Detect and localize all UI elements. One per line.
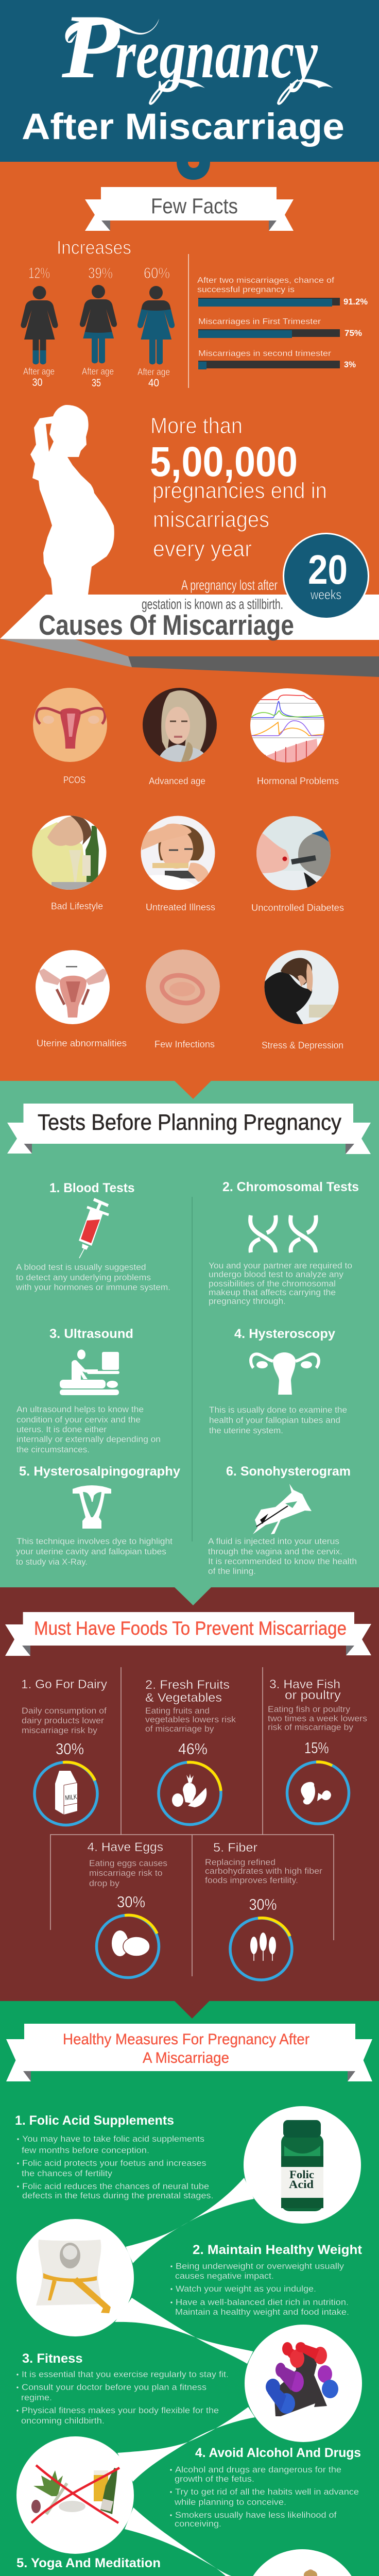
figure stat: 39 percent after age 35: 39% <box>88 265 113 282</box>
food 5: fiber: 5. Fiber <box>213 1841 257 1855</box>
measure text: conceiving. <box>175 2519 221 2529</box>
food 3: fish or poultry: 3. Have Fish <box>269 1677 340 1691</box>
measure text: the chances of fertility <box>22 2169 113 2178</box>
ribbon: healthy measures: Healthy Measures For Pregnancy After <box>63 2031 309 2048</box>
ribbon: must have foods <box>5 1612 371 1656</box>
food text: Replacing refined <box>205 1858 275 1867</box>
food text: risk of miscarriage by <box>268 1723 354 1732</box>
test heading: 3. Ultrasound <box>49 1327 133 1341</box>
food 5: fiber <box>205 1841 323 1980</box>
statistic: more than 5,00,000 pregnancies: More than <box>150 413 243 438</box>
orange section background <box>0 162 379 1081</box>
food text <box>89 1859 167 1888</box>
test heading: 1. Blood Tests <box>49 1181 135 1195</box>
food text: Eating eggs causes <box>89 1859 167 1868</box>
arrow: orange pointer <box>175 1081 211 1099</box>
food text: drop by <box>89 1879 120 1888</box>
food 4: eggs: 4. Have Eggs <box>88 1840 163 1854</box>
test text <box>16 1404 161 1454</box>
test text: through the vagina and the cervix. <box>208 1547 342 1556</box>
food text: Daily consumption of <box>22 1706 107 1716</box>
measure text <box>170 2262 349 2317</box>
bar: 75 percent: 75% <box>344 328 362 338</box>
ribbon: few facts <box>85 187 294 231</box>
test text: possibilities of the chromosomal <box>209 1279 336 1289</box>
food text: of miscarriage by <box>145 1724 214 1734</box>
test text <box>15 1262 170 1292</box>
donut: 30 percent <box>97 1915 159 1977</box>
donut: 15 percent <box>287 1762 349 1824</box>
food text: dairy products lower <box>22 1716 105 1725</box>
photo: weighing scale <box>16 2219 134 2336</box>
food text <box>145 1706 236 1734</box>
figure stat: 60 percent after age 40: 60% <box>144 265 170 282</box>
badge: 20 weeks: 20 <box>308 547 348 592</box>
test heading: 5. Hysterosalpingography <box>19 1464 180 1479</box>
cause label: bad lifestyle: Bad Lifestyle <box>51 901 103 911</box>
food text: carbohydrates with high fiber <box>205 1867 323 1876</box>
ribbon: few facts: Few Facts <box>151 194 238 218</box>
bar: 3 percent <box>198 360 356 369</box>
photo: folic acid bottle: Acid <box>289 2178 314 2191</box>
ribbon: tests before planning pregnancy: Tests Before Planning Pregnancy <box>38 1110 341 1135</box>
cause photo: stress and depression <box>263 948 340 1025</box>
food text <box>22 1706 107 1735</box>
measure text <box>16 2370 229 2426</box>
test text: This is usually done to examine the <box>209 1405 347 1415</box>
test text: with your hormones or immune system. <box>15 1282 170 1292</box>
ribbon: must have foods: Must Have Foods To Prevent Miscarriage <box>34 1618 347 1639</box>
measure text: Being underweight or overweight usually <box>176 2262 344 2271</box>
icon: uterus <box>251 1352 319 1395</box>
cause label: few infections: Few Infections <box>154 1039 215 1049</box>
test 6: sonohysterogram <box>208 1464 357 1576</box>
measure text: while planning to conceive. <box>174 2498 286 2507</box>
cause label: uncontrolled diabetes: Uncontrolled Diabetes <box>251 903 344 913</box>
test text <box>209 1405 347 1435</box>
test text: to detect any underlying problems <box>16 1273 151 1282</box>
test 1: blood tests <box>15 1181 170 1292</box>
test text: to study via X-Ray. <box>16 1557 88 1567</box>
food text: foods improves fertility. <box>205 1876 298 1885</box>
measure 2: healthy weight: 2. Maintain Healthy Weight <box>193 2243 363 2257</box>
maroon section background <box>0 1587 379 2001</box>
figure stat: 60 percent after age 40: After age <box>137 367 170 377</box>
test text: the uterine system. <box>209 1426 283 1435</box>
figure stat: 39 percent after age 35: 35 <box>92 377 101 389</box>
test text: makeup that affects carrying the <box>209 1287 336 1297</box>
figure stat: 60 percent after age 40 <box>137 265 175 389</box>
figure stat: 12 percent after age 30: 12% <box>28 265 50 282</box>
test text: A fluid is injected into your uterus <box>208 1536 339 1546</box>
badge: 20 weeks <box>283 533 369 619</box>
test text <box>16 1536 173 1567</box>
arrow: maroon pointer <box>175 2001 209 2019</box>
speech bubble connectors <box>115 2178 263 2576</box>
pregnant silhouette <box>30 405 114 595</box>
food 2: fruits and vegetables: 46% <box>178 1740 208 1758</box>
cause label: advanced age: Advanced age <box>149 776 205 786</box>
bar label: first trimester: Miscarriages in First Trimester <box>198 317 321 326</box>
measure text: Consult your doctor before you plan a fitness <box>22 2383 206 2392</box>
test heading: 4. Hysteroscopy <box>234 1327 335 1341</box>
ribbon: healthy measures: A Miscarriage <box>143 2049 229 2066</box>
cause photo: hormonal chart <box>250 688 325 763</box>
measure text: Physical fitness makes your body flexible for the <box>22 2406 219 2415</box>
measure text <box>17 2134 213 2200</box>
icon: shrimp and fish <box>301 1782 331 1805</box>
cause label: stress and depression: Stress & Depression <box>262 1040 343 1050</box>
heading band: causes of miscarriage: Causes Of Miscarriage <box>39 609 294 641</box>
divider <box>188 254 189 388</box>
test text <box>209 1261 352 1306</box>
measure 4: avoid alcohol and drugs: 4. Avoid Alcohol And Drugs <box>195 2446 361 2460</box>
measure 3: fitness: 3. Fitness <box>22 2351 82 2366</box>
food text: miscarriage risk to <box>89 1869 163 1878</box>
food text: vegetables lowers risk <box>145 1715 236 1724</box>
cause photo: bad lifestyle <box>31 814 108 891</box>
measure 2: healthy weight <box>16 2219 363 2336</box>
measure text: Try to get rid of all the habits well in advance <box>175 2487 359 2497</box>
icon: milk carton: MILK <box>65 1793 77 1802</box>
statistic: more than 5,00,000 pregnancies: miscarriages <box>153 507 269 532</box>
bar: 75 percent <box>198 328 362 338</box>
title: After Miscarriage <box>22 107 344 147</box>
bar label: after two miscarriages: successful pregnancy is <box>197 285 295 294</box>
food text: Eating fruits and <box>145 1706 210 1716</box>
measure text: Alcohol and drugs are dangerous for the <box>175 2465 341 2475</box>
measure text: regime. <box>21 2393 52 2402</box>
test text: internally or externally depending on <box>16 1434 161 1444</box>
food 2: fruits and vegetables: & Vegetables <box>145 1691 222 1705</box>
cause photo: advanced age <box>143 688 217 762</box>
food 1: dairy: 1. Go For Dairy <box>21 1677 107 1691</box>
cause photo: PCOS <box>31 685 108 762</box>
heading band: causes of miscarriage: gestation is known as a stillbirth. <box>142 596 283 612</box>
food text: miscarriage risk by <box>22 1726 98 1735</box>
heading band: causes of miscarriage <box>0 577 379 677</box>
food 5: fiber: 30% <box>249 1895 277 1913</box>
donut: 30 percent <box>35 1762 97 1825</box>
cause label: uterine abnormalities: Uterine abnormalities <box>37 1038 127 1048</box>
photo: folic acid bottle <box>244 2106 361 2224</box>
test text: undergo blood test to analyze any <box>209 1269 344 1279</box>
test text: This technique involves dye to highlight <box>16 1536 173 1546</box>
test text: It is recommended to know the health <box>208 1556 357 1566</box>
measure text: oncoming childbirth. <box>21 2416 105 2426</box>
test text <box>208 1536 357 1576</box>
test heading: 6. Sonohysterogram <box>226 1464 351 1479</box>
ribbon: tests before planning pregnancy <box>7 1104 371 1154</box>
measure text: Watch your weight as you indulge. <box>176 2284 316 2294</box>
figure stat: 39 percent after age 35: After age <box>82 366 114 377</box>
bar: 3 percent: 3% <box>344 360 356 369</box>
bar chart: chance and trimesters <box>197 276 368 369</box>
measure text: Maintain a healthy weight and food intake. <box>175 2308 349 2317</box>
statistic: more than 5,00,000 pregnancies: pregnancies end in <box>152 478 327 503</box>
test text: of the lining. <box>208 1566 256 1576</box>
measure 5: yoga and meditation: 5. Yoga And Meditation <box>16 2556 161 2570</box>
icon: fruits <box>172 1774 206 1807</box>
icon: ultrasound exam <box>60 1350 119 1395</box>
test text: the circumstances. <box>16 1445 90 1454</box>
food 4: eggs <box>88 1840 167 1977</box>
photo: group yoga <box>244 2549 361 2576</box>
cause label: hormonal problems: Hormonal Problems <box>257 776 339 786</box>
icon: syringe <box>79 1199 109 1258</box>
title: regnancy <box>115 16 318 93</box>
test text: pregnancy through. <box>209 1296 286 1306</box>
measure 3: fitness <box>16 2325 362 2442</box>
measure text: It is essential that you exercise regularly to stay fit. <box>22 2370 229 2379</box>
heading band: causes of miscarriage: A pregnancy lost after <box>181 577 278 593</box>
measure text: Folic acid reduces the chances of neural tube <box>22 2182 209 2191</box>
food 4: eggs: 30% <box>117 1893 145 1911</box>
measure text: few months before conception. <box>22 2146 149 2155</box>
measure text: defects in the fetus during the prenatal stages. <box>22 2191 213 2200</box>
measure text: Folic acid protects your foetus and increases <box>22 2159 206 2168</box>
test text: condition of your cervix and the <box>16 1415 141 1425</box>
donut: 30 percent <box>230 1918 292 1980</box>
icon: chromosomes <box>250 1215 316 1252</box>
measure text <box>170 2465 359 2529</box>
test text: An ultrasound helps to know the <box>16 1404 144 1414</box>
bar label: second trimester: Miscarriages in second trimester <box>198 349 331 358</box>
food 2: fruits and vegetables <box>145 1678 236 1825</box>
food 2: fruits and vegetables: 2. Fresh Fruits <box>145 1678 230 1692</box>
test text: A blood test is usually suggested <box>16 1262 146 1272</box>
measure text: causes negative impact. <box>175 2272 274 2281</box>
food text: two times a week lowers <box>268 1714 367 1723</box>
title <box>22 0 344 147</box>
icon: uterus with probe <box>253 1484 312 1534</box>
green section background <box>0 2001 379 2576</box>
cause photo: uterine abnormalities diagram <box>33 948 111 1025</box>
food 1: dairy: 30% <box>56 1740 84 1758</box>
food 3: fish or poultry <box>268 1677 367 1824</box>
test heading: 2. Chromosomal Tests <box>222 1180 359 1194</box>
photo: folic acid bottle: Folic <box>289 2168 314 2181</box>
bar: 91.2 percent <box>198 297 368 307</box>
statistic: more than 5,00,000 pregnancies <box>150 413 327 562</box>
test text: health of your fallopian tubes and <box>209 1415 340 1425</box>
hook connector <box>177 162 210 180</box>
photo: alcohol and drugs crossed out <box>16 2436 134 2554</box>
statistic: more than 5,00,000 pregnancies: every year <box>153 536 252 562</box>
measure text: Have a well-balanced diet rich in nutrition. <box>176 2298 349 2307</box>
header background <box>0 0 379 162</box>
bar label: after two miscarriages: After two miscarriages, chance of <box>197 276 335 285</box>
bar: 91.2 percent: 91.2% <box>343 297 368 307</box>
food 3: fish or poultry: 15% <box>304 1739 329 1757</box>
food text: Eating fish or poultry <box>268 1705 351 1714</box>
icon: milk carton <box>55 1771 77 1815</box>
badge: 20 weeks: weeks <box>310 587 341 602</box>
test text: uterus. It is done either <box>16 1425 107 1434</box>
measure text: You may have to take folic acid supplements <box>22 2134 204 2144</box>
measure text: Smokers usually have less likelihood of <box>175 2511 337 2520</box>
figure stat: 12 percent after age 30: After age <box>23 366 55 377</box>
donut: 46 percent <box>159 1762 221 1825</box>
cause label: PCOS: PCOS <box>63 775 85 785</box>
measure text: growth of the fetus. <box>175 2475 254 2484</box>
figure stat: 39 percent after age 35 <box>80 265 117 389</box>
icon: cervix and uterine cavity <box>73 1485 111 1529</box>
bar label: after two miscarriages <box>197 276 335 294</box>
arrow: teal pointer <box>175 1587 211 1605</box>
test text: your uterine cavity and fallopian tubes <box>16 1547 166 1556</box>
cause label: untreated illness: Untreated Illness <box>146 902 215 912</box>
measure 1: folic acid <box>15 2106 361 2224</box>
measure 4: avoid alcohol and drugs <box>16 2436 361 2554</box>
ribbon: healthy measures <box>6 2024 372 2081</box>
measure 5: yoga and meditation <box>16 2549 361 2576</box>
test 5: hysterosalpingography <box>16 1464 180 1567</box>
teal section background <box>0 1081 379 1587</box>
statistic: more than 5,00,000 pregnancies: 5,00,000 <box>150 438 298 485</box>
food text <box>205 1858 323 1885</box>
icon: eggs <box>112 1930 150 1956</box>
heading: increases: Increases <box>57 237 131 258</box>
icon: wheat <box>250 1933 276 1961</box>
test 4: hysteroscopy <box>209 1327 347 1435</box>
figure stat: 12 percent after age 30: 30 <box>32 377 42 388</box>
connector lines <box>50 1667 334 1976</box>
test 3: ultrasound <box>16 1327 161 1454</box>
cause photo: skin infection <box>146 950 220 1025</box>
divider <box>192 1197 193 1541</box>
test text: You and your partner are required to <box>209 1261 352 1270</box>
test 2: chromosomal tests <box>209 1180 359 1306</box>
measure 1: folic acid: 1. Folic Acid Supplements <box>15 2113 174 2128</box>
figure stat: 60 percent after age 40: 40 <box>148 377 159 389</box>
figure stat: 12 percent after age 30 <box>21 265 58 388</box>
cause photo: diabetes blood test <box>256 816 331 890</box>
food 1: dairy <box>21 1677 107 1825</box>
food text <box>268 1705 367 1732</box>
cause photo: untreated illness <box>141 816 215 890</box>
photo: dumbbells <box>245 2325 362 2442</box>
food 3: fish or poultry: or poultry <box>285 1688 341 1702</box>
